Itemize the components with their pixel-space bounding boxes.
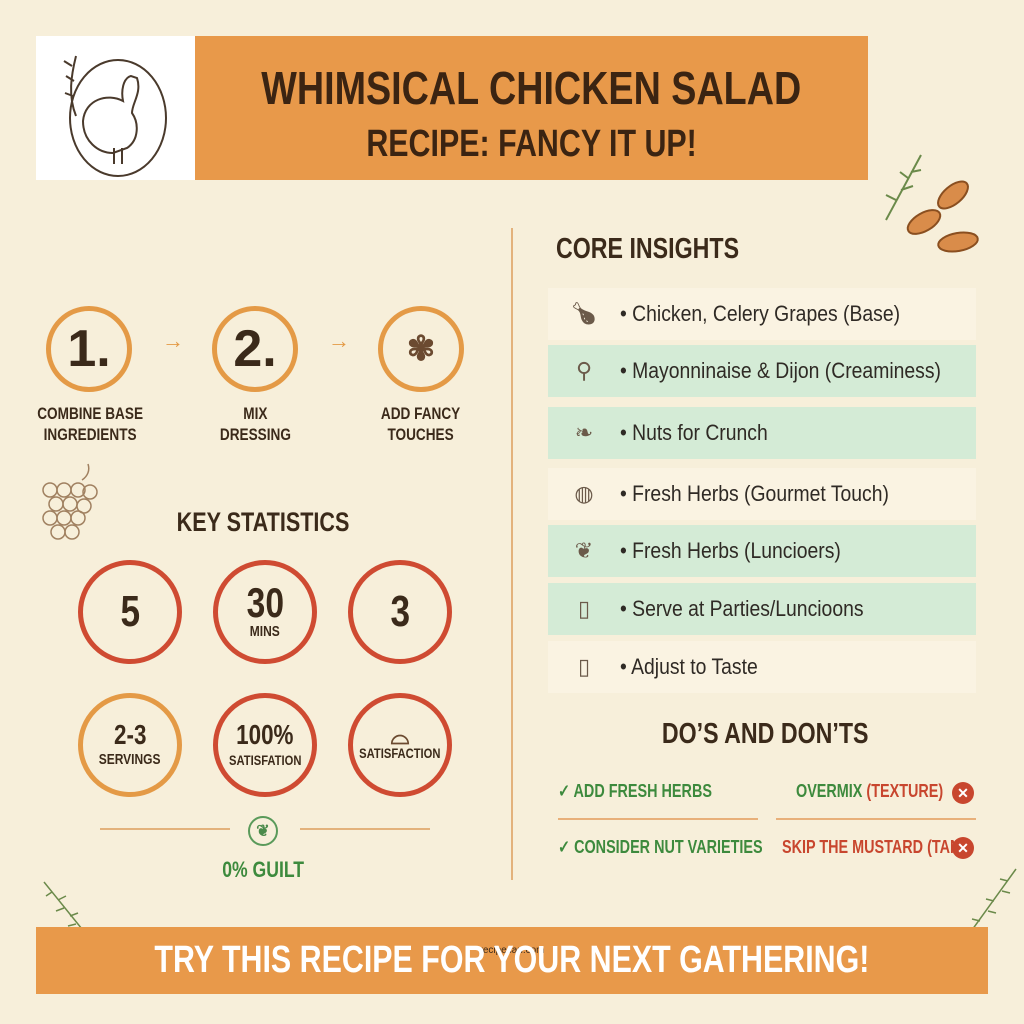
dos and donts list: ✕ bbox=[957, 784, 969, 800]
core insights heading: CORE INSIGHTS bbox=[556, 233, 739, 265]
step 2: 2. bbox=[233, 320, 277, 378]
steps: ADD FANCY bbox=[381, 404, 461, 423]
footer banner: recipecan.com bbox=[479, 945, 545, 956]
icon: leaf bbox=[248, 816, 278, 846]
step 3: ✾ bbox=[407, 330, 435, 368]
icon: leaf: ❦ bbox=[256, 823, 270, 840]
step 1 bbox=[46, 306, 132, 392]
footer banner: TRY THIS RECIPE FOR YOUR NEXT GATHERING! bbox=[154, 939, 870, 981]
insights list: • Nuts for Crunch bbox=[620, 420, 768, 445]
insights list: • Serve at Parties/Luncioons bbox=[620, 596, 864, 621]
step 3 bbox=[378, 306, 464, 392]
header title banner: WHIMSICAL CHICKEN SALAD bbox=[262, 62, 801, 114]
steps: MIX bbox=[243, 404, 267, 423]
insights list: ▯ bbox=[578, 654, 590, 679]
insights list: ◍ bbox=[574, 481, 594, 506]
insights list: ❦ bbox=[575, 538, 593, 563]
icon: rosemary left bbox=[44, 882, 82, 927]
insights list: ▯ bbox=[578, 596, 590, 621]
stats grid: MINS bbox=[250, 623, 280, 640]
key statistics heading: KEY STATISTICS bbox=[177, 507, 349, 537]
icon: chicken bbox=[64, 56, 167, 177]
insights list: • Mayonninaise & Dijon (Creaminess) bbox=[620, 358, 941, 383]
stats grid: SERVINGS bbox=[99, 751, 161, 768]
dos and donts list bbox=[558, 781, 976, 859]
insights list: • Fresh Herbs (Luncioers) bbox=[620, 538, 841, 563]
steps: COMBINE BASE bbox=[37, 404, 143, 423]
divider bbox=[511, 228, 513, 880]
insights list: ⚲ bbox=[576, 358, 592, 383]
stats grid: SATISFACTION bbox=[359, 745, 441, 761]
steps: DRESSING bbox=[219, 425, 291, 444]
steps: INGREDIENTS bbox=[44, 425, 136, 444]
dos and donts heading: DO’S AND DON’TS bbox=[662, 718, 868, 750]
icon: grapes bbox=[42, 464, 98, 540]
insights list: • Chicken, Celery Grapes (Base) bbox=[620, 301, 900, 326]
arrow: → bbox=[328, 328, 350, 353]
dos and donts list: OVERMIX (TEXTURE) bbox=[796, 781, 943, 801]
stats grid: 2-3 bbox=[114, 719, 146, 750]
dos and donts list: SKIP THE MUSTARD (TANG bbox=[782, 837, 972, 857]
insights list: ❧ bbox=[575, 420, 593, 445]
insights list: • Fresh Herbs (Gourmet Touch) bbox=[620, 481, 889, 506]
icon: rosemary right bbox=[972, 868, 1016, 927]
insights list: • Adjust to Taste bbox=[620, 654, 758, 679]
step 1: 1. bbox=[67, 320, 111, 378]
arrow: → bbox=[162, 328, 184, 353]
insights list: 🍗︎ bbox=[570, 301, 598, 326]
dos and donts list: ✓ CONSIDER NUT VARIETIES bbox=[558, 837, 763, 857]
steps: TOUCHES bbox=[388, 425, 454, 444]
header title banner bbox=[195, 36, 868, 180]
stats grid: 100% bbox=[236, 719, 294, 750]
footer banner bbox=[36, 927, 988, 994]
step 2 bbox=[212, 306, 298, 392]
stats grid: 30 bbox=[246, 579, 284, 626]
stats grid: SATISFATION bbox=[229, 752, 301, 768]
0% guilt: 0% GUILT bbox=[222, 857, 304, 882]
stats grid: 5 bbox=[120, 587, 140, 636]
stats grid: ⌓ bbox=[390, 723, 409, 750]
stats grid bbox=[78, 560, 452, 797]
stats grid: 3 bbox=[390, 587, 410, 636]
header logo box bbox=[36, 36, 195, 180]
header title banner: RECIPE: FANCY IT UP! bbox=[366, 123, 697, 165]
dos and donts list: ✕ bbox=[957, 840, 969, 856]
insights list bbox=[548, 301, 976, 679]
guilt divider bbox=[100, 828, 230, 830]
icon: almonds bbox=[885, 154, 979, 252]
dos and donts list: ✓ ADD FRESH HERBS bbox=[558, 781, 712, 801]
steps bbox=[37, 306, 464, 444]
